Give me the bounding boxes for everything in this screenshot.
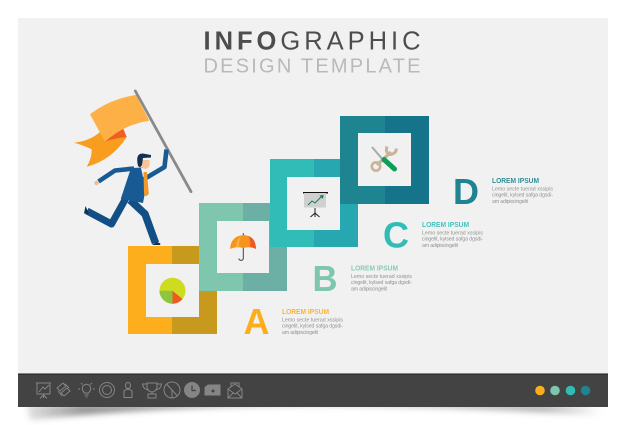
body A: cingelit, kylsed safga dgsdi- xyxy=(282,324,343,330)
letter A: A xyxy=(244,301,270,342)
block A xyxy=(244,301,343,342)
icon: person xyxy=(124,382,132,398)
letter D: D xyxy=(453,171,479,212)
body C: am adipiscingelit xyxy=(422,243,459,249)
flag main xyxy=(90,95,149,142)
heading: infographic: INFOGRAPHIC xyxy=(204,28,420,56)
icon: chart circle xyxy=(164,382,180,398)
heading B: LOREM IPSUM xyxy=(351,266,398,272)
block B xyxy=(312,258,412,299)
block C xyxy=(383,214,483,256)
bottom bar shadow xyxy=(26,404,602,420)
icon: clock xyxy=(184,382,200,398)
flag fold xyxy=(105,128,127,142)
runner with flag xyxy=(74,91,191,245)
footer icon row xyxy=(36,382,242,398)
icon: clock hands xyxy=(192,386,196,390)
letter C: C xyxy=(383,214,409,256)
flag tail xyxy=(74,132,127,167)
footer bar xyxy=(18,374,608,407)
icon: pie chart xyxy=(160,278,186,304)
body D: Lemo secte tuerad xssipis xyxy=(492,186,553,192)
body D: am adipiscingelit xyxy=(492,199,529,205)
step square D xyxy=(340,116,429,204)
body C: Lemo secte tuerad xssipis xyxy=(422,230,483,236)
icon: trophy xyxy=(142,383,162,398)
icon: gear inner xyxy=(102,386,112,394)
step square A xyxy=(128,246,217,334)
body B: am adipiscingelit xyxy=(351,286,388,292)
subtitle: design template: DESIGN TEMPLATE xyxy=(204,56,420,78)
icon: banknote xyxy=(205,385,220,395)
businessman xyxy=(84,150,166,245)
step square B xyxy=(199,203,287,291)
body D: cingelit, kylsed safga dgsdi- xyxy=(492,192,553,198)
icon: banknote centre xyxy=(212,390,214,392)
heading D: LOREM IPSUM xyxy=(492,178,539,185)
icon: envelope xyxy=(228,383,242,398)
step square C xyxy=(270,159,358,247)
icon: presentation xyxy=(36,383,51,398)
icon: umbrella xyxy=(230,233,256,260)
footer colour dots xyxy=(535,386,590,395)
body C: cingelit, kylsed safga dgsdi- xyxy=(422,236,483,242)
letter B: B xyxy=(312,258,338,299)
body A: am adipiscingelit xyxy=(282,330,319,336)
block D xyxy=(453,171,553,212)
body A: Lemo secte tuerad xssipis xyxy=(282,318,343,324)
heading C: LOREM IPSUM xyxy=(422,222,469,229)
icon: light bulb xyxy=(78,383,95,397)
heading A: LOREM IPSUM xyxy=(282,309,329,316)
icon: wrench and screwdriver xyxy=(372,146,396,171)
body B: cingelit, kylsed safga dgsdi- xyxy=(351,280,412,286)
body B: Lemo secte tuerad xssipis xyxy=(351,274,412,280)
icon: paper clip xyxy=(57,383,70,396)
background panel xyxy=(18,18,608,374)
title xyxy=(204,28,420,78)
icon: gear xyxy=(100,382,114,398)
flag pole xyxy=(135,91,191,192)
icon: presentation board xyxy=(303,192,328,217)
